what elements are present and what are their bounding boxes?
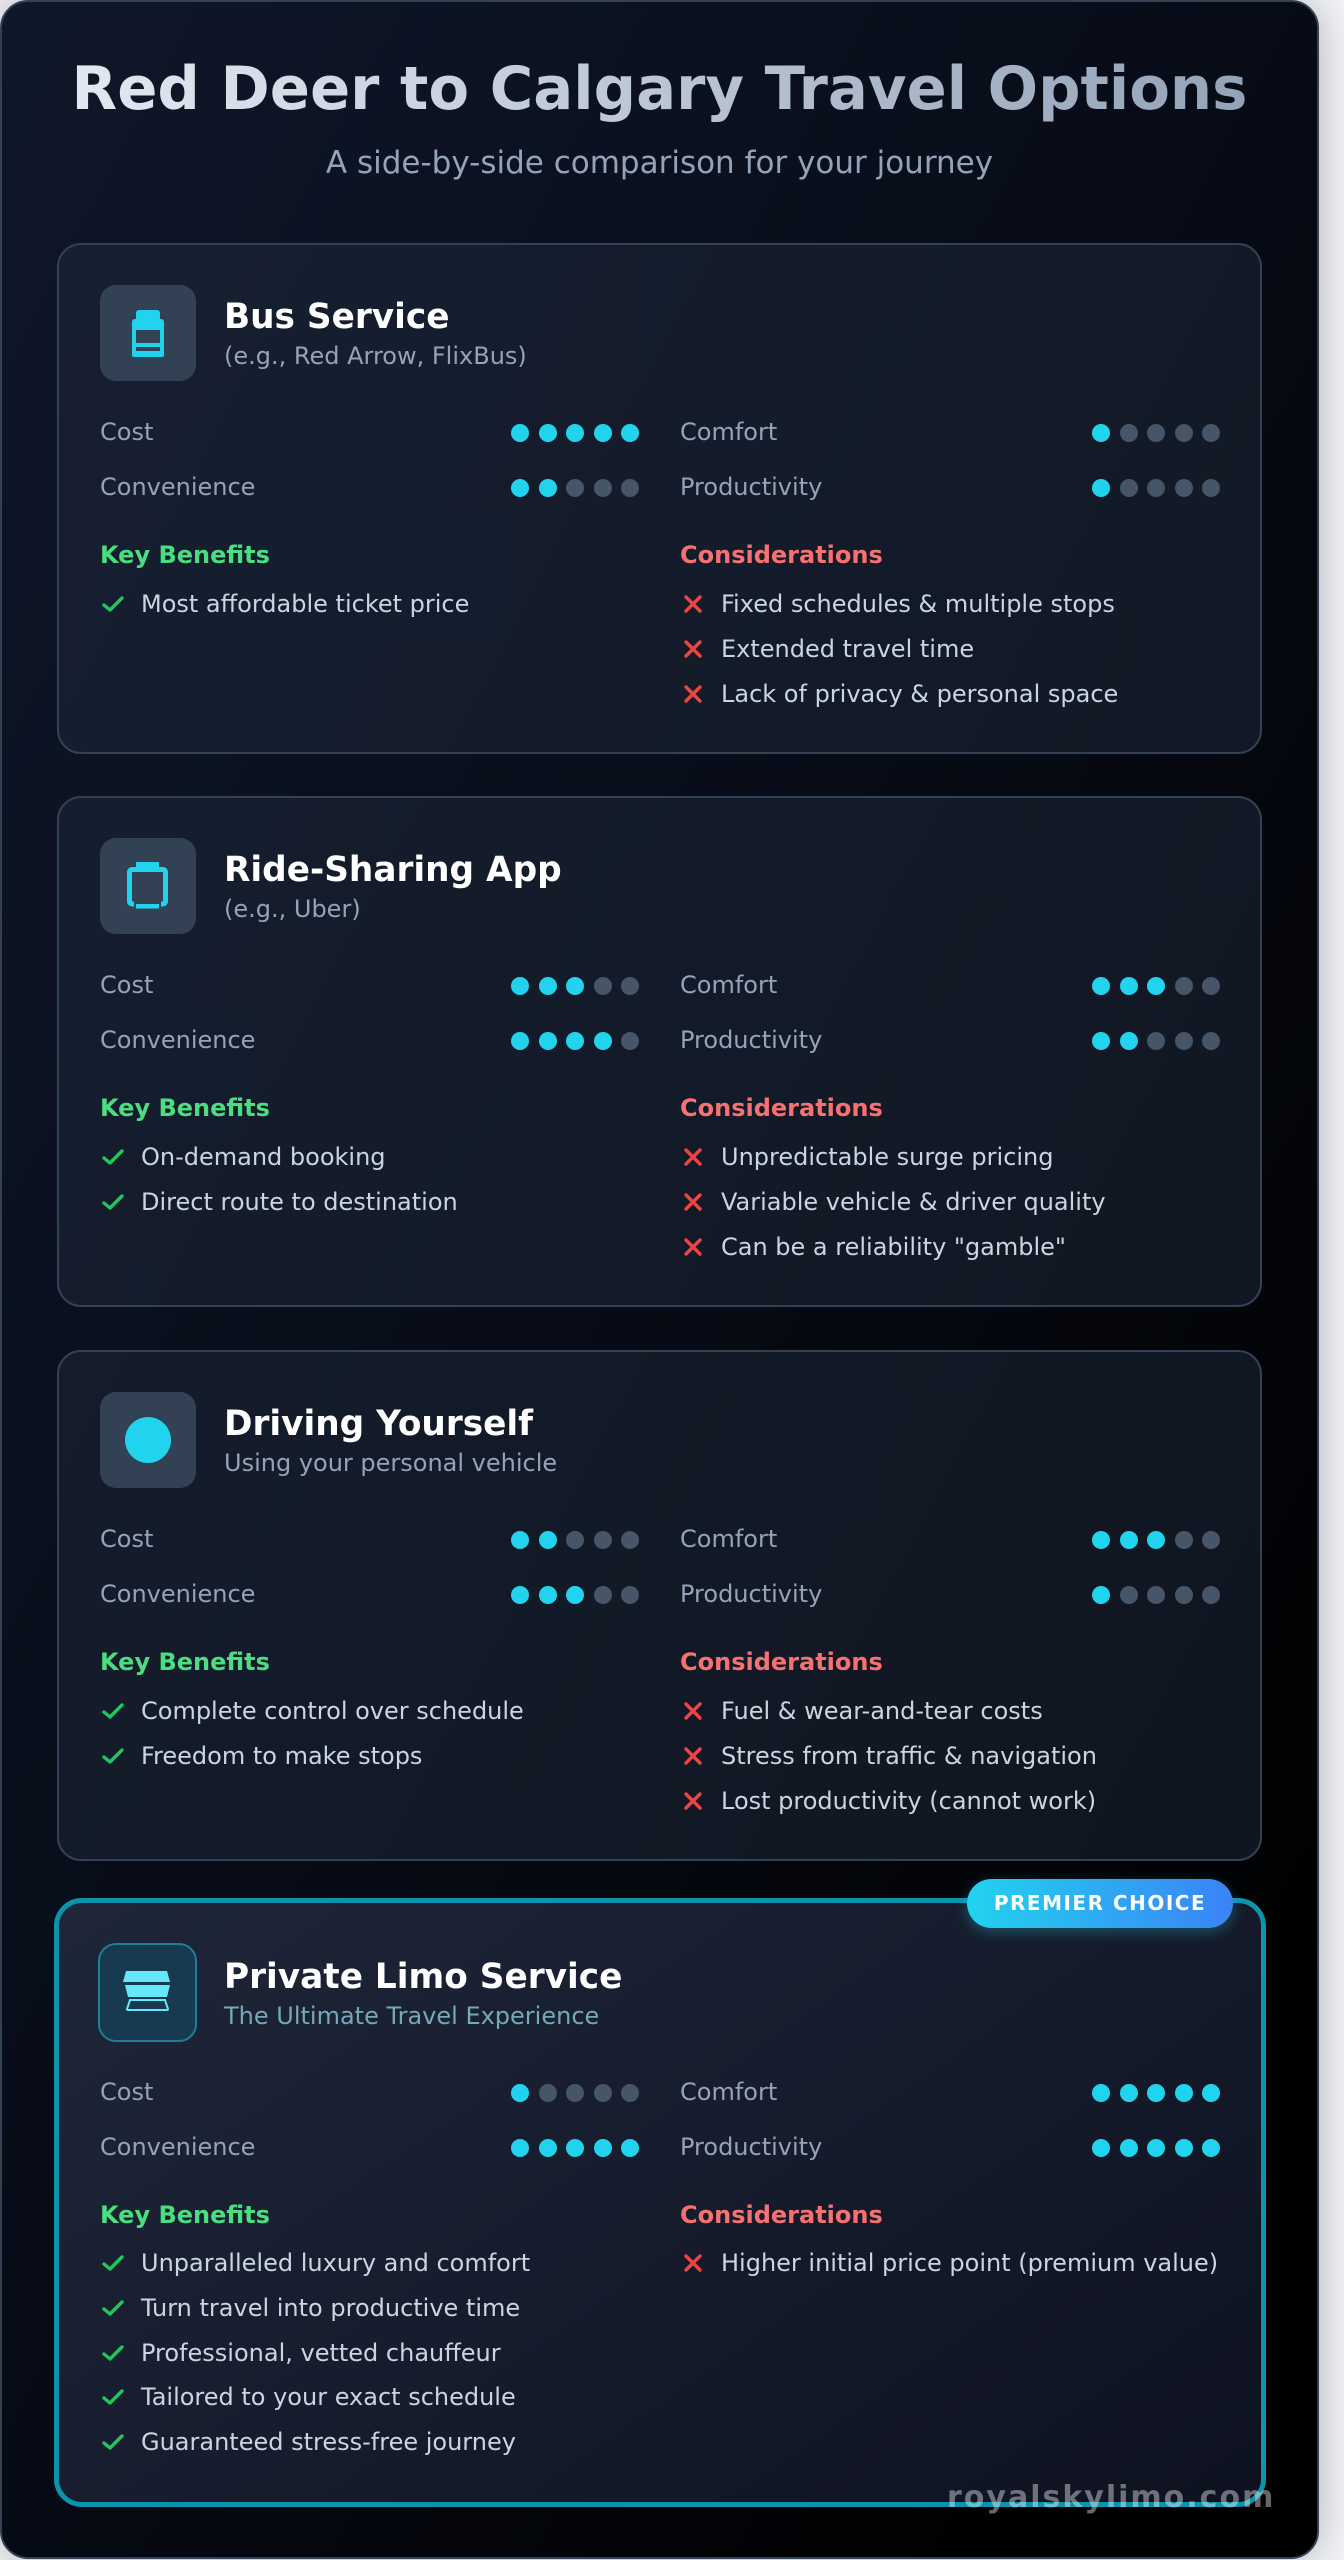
- rating dots: productivity 1 of 5: [1092, 1586, 1220, 1604]
- benefit item: Direct route to destination: [141, 1188, 458, 1216]
- rating label: productivity: Productivity: [680, 1026, 822, 1054]
- rating dots: cost 2 of 5: [511, 1531, 639, 1549]
- panel: ride-sharing app: [57, 796, 1262, 1307]
- benefit item: Freedom to make stops: [141, 1742, 422, 1770]
- consideration item: Unpredictable surge pricing: [721, 1143, 1054, 1171]
- panel: bus service: [57, 243, 1262, 754]
- icon: bus: [100, 285, 196, 381]
- badge: premier choice: PREMIER CHOICE: [994, 1891, 1206, 1915]
- rating label: comfort: Comfort: [680, 2078, 777, 2106]
- heading: driving yourself: Driving Yourself: [224, 1404, 533, 1444]
- rating dots: productivity 5 of 5: [1092, 2139, 1220, 2157]
- rating dots: convenience 2 of 5: [511, 479, 639, 497]
- heading: key benefits: Key Benefits: [100, 1094, 270, 1122]
- consideration item: Fixed schedules & multiple stops: [721, 590, 1115, 618]
- rating label: productivity: Productivity: [680, 473, 822, 501]
- rating label: comfort: Comfort: [680, 418, 777, 446]
- rating label: convenience: Convenience: [100, 1580, 255, 1608]
- rating dots: convenience 3 of 5: [511, 1586, 639, 1604]
- heading: bus service: Bus Service: [224, 297, 450, 337]
- benefit item: Professional, vetted chauffeur: [141, 2339, 501, 2367]
- panel: driving yourself: [57, 1350, 1262, 1861]
- heading: considerations: Considerations: [680, 541, 883, 569]
- heading: considerations: Considerations: [680, 2201, 883, 2229]
- consideration item: Stress from traffic & navigation: [721, 1742, 1097, 1770]
- consideration item: Can be a reliability "gamble": [721, 1233, 1066, 1261]
- rating label: convenience: Convenience: [100, 2133, 255, 2161]
- rating label: convenience: Convenience: [100, 1026, 255, 1054]
- heading: key benefits: Key Benefits: [100, 541, 270, 569]
- rating label: cost: Cost: [100, 418, 153, 446]
- benefit item: Turn travel into productive time: [141, 2294, 520, 2322]
- heading: private limo service: Private Limo Service: [224, 1957, 622, 1997]
- rating dots: convenience 5 of 5: [511, 2139, 639, 2157]
- rating label: cost: Cost: [100, 2078, 153, 2106]
- subheading: personal vehicle: Using your personal vehicle: [224, 1449, 557, 1477]
- rating dots: comfort 1 of 5: [1092, 424, 1220, 442]
- consideration item: Fuel & wear-and-tear costs: [721, 1697, 1043, 1725]
- title: Red Deer to Calgary Travel Options: [72, 54, 1247, 123]
- rating label: cost: Cost: [100, 1525, 153, 1553]
- rating dots: productivity 2 of 5: [1092, 1032, 1220, 1050]
- icon: steering wheel disc: [100, 1392, 196, 1488]
- rating label: convenience: Convenience: [100, 473, 255, 501]
- consideration item: Higher initial price point (premium value): [721, 2249, 1218, 2277]
- rating dots: convenience 4 of 5: [511, 1032, 639, 1050]
- rating dots: comfort 5 of 5: [1092, 2084, 1220, 2102]
- rating dots: comfort 3 of 5: [1092, 1531, 1220, 1549]
- rating dots: cost 3 of 5: [511, 977, 639, 995]
- benefit item: Unparalleled luxury and comfort: [141, 2249, 530, 2277]
- benefit item: Tailored to your exact schedule: [141, 2383, 516, 2411]
- heading: key benefits: Key Benefits: [100, 1648, 270, 1676]
- panel: private limo service: [54, 1898, 1266, 2507]
- benefit item: Most affordable ticket price: [141, 590, 469, 618]
- badge: premier choice: [967, 1879, 1233, 1928]
- consideration item: Extended travel time: [721, 635, 974, 663]
- rating dots: cost 5 of 5: [511, 424, 639, 442]
- icon: car: [100, 838, 196, 934]
- subheading: bus examples: (e.g., Red Arrow, FlixBus): [224, 342, 527, 370]
- heading: considerations: Considerations: [680, 1094, 883, 1122]
- consideration item: Variable vehicle & driver quality: [721, 1188, 1106, 1216]
- rating label: comfort: Comfort: [680, 971, 777, 999]
- consideration item: Lack of privacy & personal space: [721, 680, 1118, 708]
- heading: ride-sharing app: Ride-Sharing App: [224, 850, 562, 890]
- watermark: royalskylimo.com: [947, 2480, 1275, 2515]
- rating label: cost: Cost: [100, 971, 153, 999]
- consideration item: Lost productivity (cannot work): [721, 1787, 1096, 1815]
- rating dots: comfort 3 of 5: [1092, 977, 1220, 995]
- heading: considerations: Considerations: [680, 1648, 883, 1676]
- subheading: ultimate experience: The Ultimate Travel Experience: [224, 2002, 599, 2030]
- rating dots: productivity 1 of 5: [1092, 479, 1220, 497]
- benefit item: On-demand booking: [141, 1143, 386, 1171]
- rating label: comfort: Comfort: [680, 1525, 777, 1553]
- rating label: productivity: Productivity: [680, 2133, 822, 2161]
- subheading: ride-sharing example: (e.g., Uber): [224, 895, 361, 923]
- benefit item: Guaranteed stress-free journey: [141, 2428, 516, 2456]
- rating dots: cost 1 of 5: [511, 2084, 639, 2102]
- benefit item: Complete control over schedule: [141, 1697, 524, 1725]
- icon: limo: [98, 1943, 197, 2042]
- heading: key benefits: Key Benefits: [100, 2201, 270, 2229]
- rating label: productivity: Productivity: [680, 1580, 822, 1608]
- subtitle: A side-by-side comparison for your journey: [326, 145, 993, 181]
